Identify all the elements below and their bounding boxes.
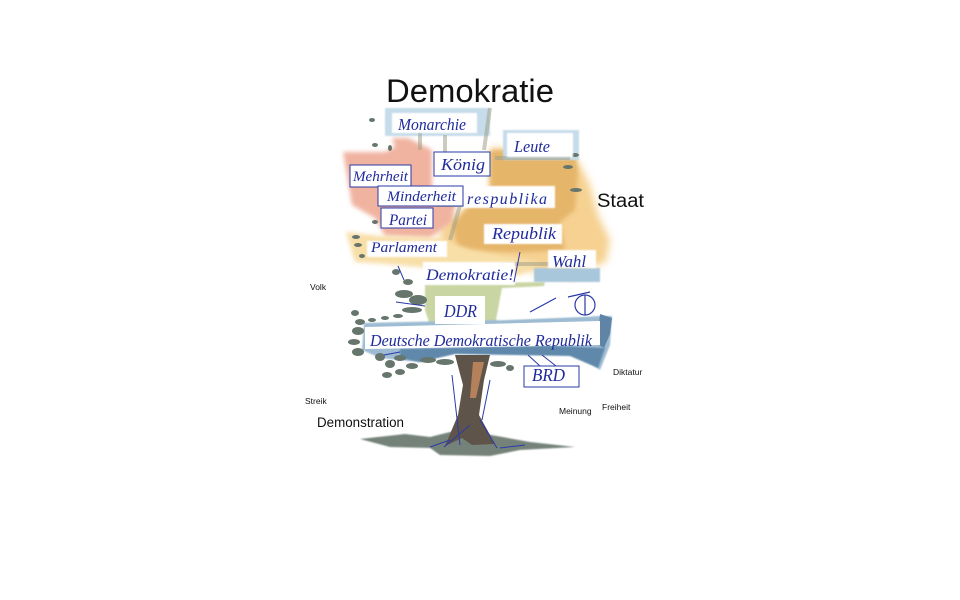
label: Streik: Streik <box>305 396 327 406</box>
Wahl blue wash <box>534 268 600 282</box>
salmon wash <box>343 138 458 238</box>
boxed label: Mehrheit <box>350 165 411 187</box>
handwritten: Leute: Leute <box>513 137 550 156</box>
label: Freiheit: Freiheit <box>602 402 631 412</box>
illustration: watercolor tree <box>343 108 612 456</box>
handwritten: König: König <box>440 155 485 174</box>
handwritten: respublika: respublika <box>467 191 547 208</box>
handwritten: Wahl: Wahl <box>552 252 586 271</box>
white label: Demokratie <box>423 262 515 285</box>
label: Staat: Staat <box>597 191 645 212</box>
foliage leaves <box>348 118 582 378</box>
orange wash <box>440 146 610 278</box>
white label: Monarchie <box>392 113 477 133</box>
handwritten: Deutsche Demokratische Republik: Deutsche Demokratische Republik <box>369 331 592 350</box>
white label: DDR <box>435 296 485 324</box>
green wash <box>425 282 545 325</box>
boxed label: BRD <box>524 366 579 387</box>
trunk <box>445 355 495 446</box>
label: Volk: Volk <box>310 282 327 292</box>
grey shading strokes <box>385 108 590 264</box>
handwritten: BRD: BRD <box>532 365 565 385</box>
light blue Leute frame <box>503 130 579 160</box>
ground shadow <box>360 432 575 456</box>
white label: Leute <box>507 133 573 157</box>
label: Meinung: Meinung <box>559 406 592 416</box>
label: Diktatur: Diktatur <box>613 367 642 377</box>
dark right band end <box>597 314 612 348</box>
ink lines <box>384 252 556 448</box>
title: Demokratie <box>386 73 554 109</box>
white band: Deutsche Demokratische Republik <box>365 321 600 349</box>
boxed label: Partei <box>381 208 433 228</box>
handwritten: Monarchie: Monarchie <box>397 115 466 134</box>
light blue monarchy frame <box>385 108 490 136</box>
handwritten: Partei: Partei <box>388 212 427 229</box>
handwritten: Republik: Republik <box>491 224 556 243</box>
ochre wash <box>452 150 578 252</box>
handwritten: Demokratie: Demokratie! <box>425 267 514 284</box>
trunk highlight <box>470 362 484 398</box>
boxed label: Minderheit <box>378 186 463 206</box>
boxed label: König <box>434 152 490 176</box>
handwritten: Mehrheit: Mehrheit <box>352 169 409 185</box>
white label: Parlament <box>367 241 447 257</box>
icon: apple <box>530 292 595 315</box>
label: Demonstration: Demonstration <box>317 415 404 430</box>
white label: Republik <box>484 224 562 244</box>
white label: Wahl <box>548 250 596 268</box>
handwritten: Parlament: Parlament <box>370 240 438 256</box>
white area: apple <box>496 284 592 320</box>
pale yellow wash <box>346 232 540 275</box>
blue band <box>362 316 612 370</box>
handwritten: Minderheit: Minderheit <box>386 189 457 205</box>
white label: republika <box>463 186 555 208</box>
handwritten: DDR: DDR <box>443 301 477 321</box>
dark blue under band <box>400 346 605 368</box>
